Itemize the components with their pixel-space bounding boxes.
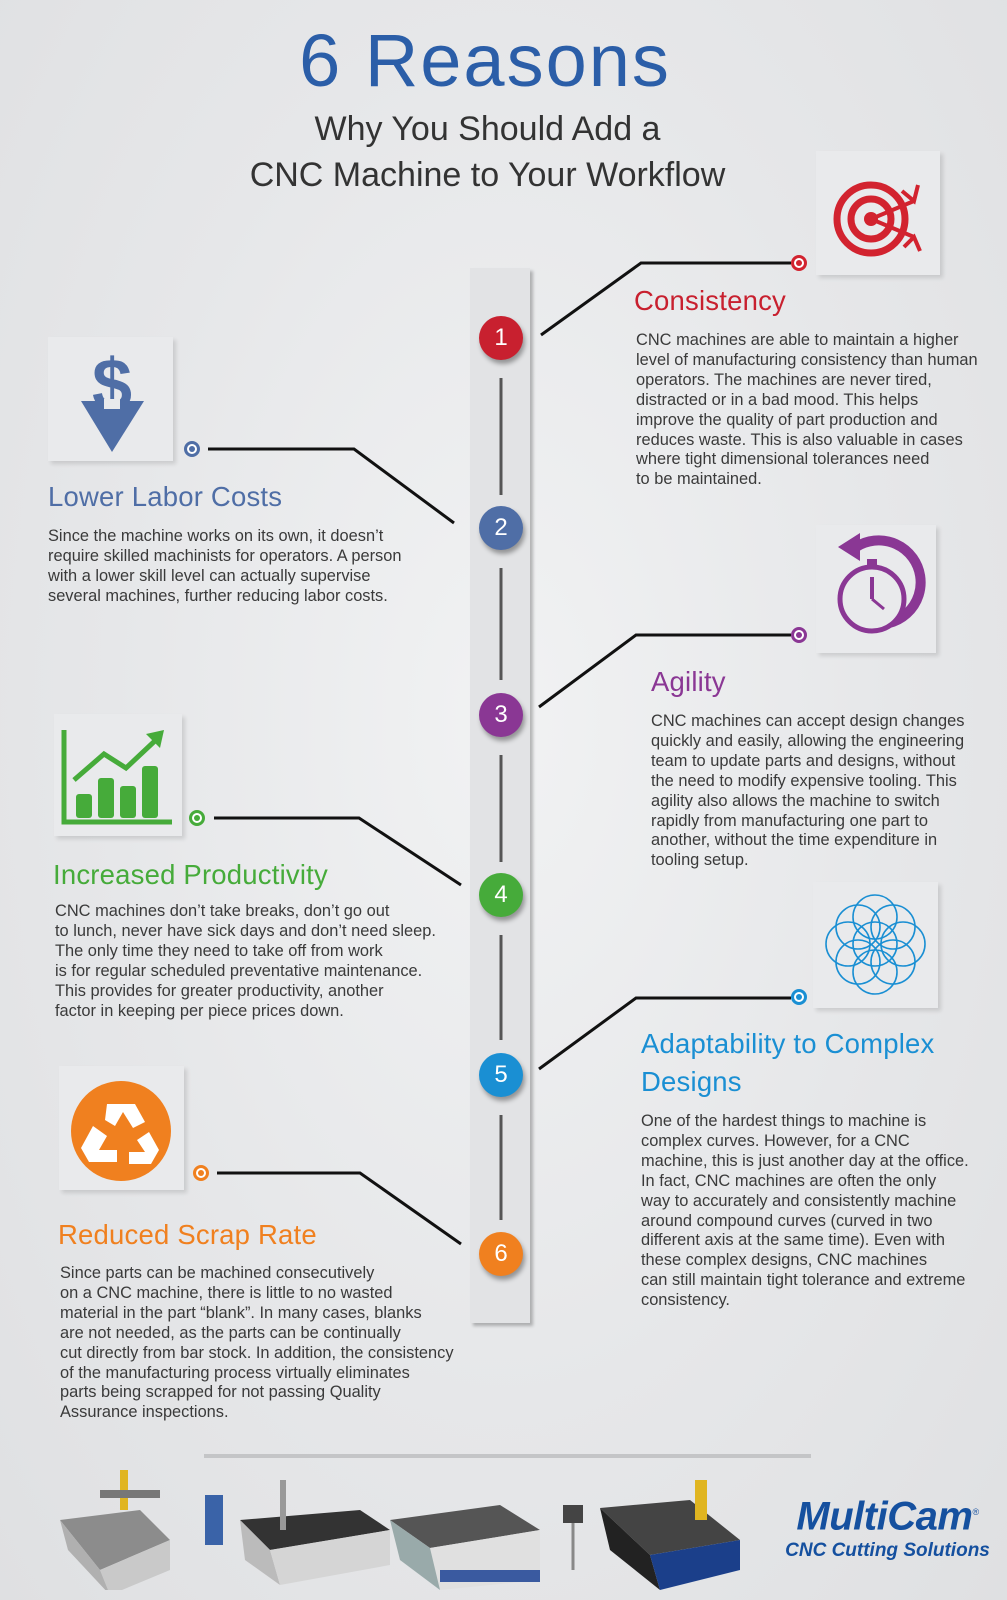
- text: around compound curves (curved in two: [641, 1212, 933, 1230]
- text: these complex designs, CNC machines: [641, 1251, 927, 1269]
- text: reduces waste. This is also valuable in cases: [636, 431, 963, 449]
- panel: lower labor costs: [48, 339, 401, 605]
- heading: Consistency: [634, 285, 786, 316]
- dot: [791, 989, 807, 1005]
- text: This provides for greater productivity, another: [55, 982, 384, 1000]
- text: consistency.: [641, 1291, 730, 1309]
- number circles: [479, 316, 523, 360]
- dot: [791, 627, 807, 643]
- dot: [189, 810, 205, 826]
- text: is for regular scheduled preventative maintenance.: [55, 962, 422, 980]
- text: with a lower skill level can actually supervise: [48, 567, 370, 585]
- text: Assurance inspections.: [60, 1403, 229, 1421]
- title: 6 Reasons: [299, 19, 671, 102]
- panel: agility: [651, 527, 964, 869]
- text: [48, 527, 401, 605]
- heading: Agility: [651, 666, 726, 697]
- text: level of manufacturing consistency than human: [636, 351, 978, 369]
- heading: Adaptability to Complex Designs: [641, 1028, 934, 1097]
- text: way to accurately and consistently machine: [641, 1192, 956, 1210]
- machine 1: [60, 1470, 170, 1595]
- text: agility also allows the machine to switch: [651, 792, 940, 810]
- text: factor in keeping per piece prices down.: [55, 1002, 344, 1020]
- divider: [204, 1454, 811, 1458]
- text: parts being scrapped for not passing Quality: [60, 1383, 381, 1401]
- text: 4: [494, 881, 508, 908]
- logo: MultiCam®: [796, 1494, 979, 1538]
- text: can still maintain tight tolerance and extreme: [641, 1271, 965, 1289]
- text: another, without the time expenditure in: [651, 831, 937, 849]
- text: distracted or in a bad mood. This helps: [636, 391, 918, 409]
- text: require skilled machinists for operators. A person: [48, 547, 401, 565]
- text: tooling setup.: [651, 851, 749, 869]
- machines illustration: [60, 1470, 740, 1590]
- text: 5: [494, 1061, 508, 1088]
- text: One of the hardest things to machine is: [641, 1112, 926, 1130]
- text: The only time they need to take off from work: [55, 942, 383, 960]
- text: the need to modify expensive tooling. This: [651, 772, 957, 790]
- text: Since parts can be machined consecutively: [60, 1264, 374, 1282]
- text: 2: [494, 514, 508, 541]
- logo: CNC Cutting Solutions: [785, 1540, 990, 1561]
- panel: consistency: [634, 153, 978, 488]
- text: In fact, CNC machines are often the only: [641, 1172, 936, 1190]
- text: machine, this is just another day at the office.: [641, 1152, 969, 1170]
- machine 2: [205, 1480, 390, 1585]
- text: Since the machine works on its own, it doesn’t: [48, 527, 383, 545]
- subtitle: CNC Machine to Your Workflow: [250, 156, 725, 194]
- text: on a CNC machine, there is little to no wasted: [60, 1284, 393, 1302]
- panel: increased productivity: [53, 716, 436, 1020]
- text: complex curves. However, for a CNC: [641, 1132, 910, 1150]
- text: several machines, further reducing labor costs.: [48, 587, 388, 605]
- text: quickly and easily, allowing the engineering: [651, 732, 964, 750]
- icon: stopwatch: [816, 525, 936, 653]
- icon: target: [816, 151, 940, 275]
- text: [55, 902, 436, 1020]
- text: improve the quality of part production and: [636, 411, 938, 429]
- subtitle: [250, 110, 726, 194]
- dot: [791, 255, 807, 271]
- panel: reduced scrap rate: [58, 1068, 454, 1421]
- icon: recycle: [59, 1066, 184, 1190]
- heading: Reduced Scrap Rate: [58, 1219, 317, 1250]
- text: cut directly from bar stock. In addition, the consistency: [60, 1344, 454, 1362]
- text: 3: [494, 701, 508, 728]
- machine 3: [390, 1505, 583, 1590]
- icon: circles pattern: [813, 882, 938, 1008]
- heading: Lower Labor Costs: [48, 481, 282, 512]
- timeline column: [470, 268, 530, 1323]
- text: material in the part “blank”. In many cases, blanks: [60, 1304, 422, 1322]
- heading: Increased Productivity: [53, 859, 328, 890]
- icon: dollar down: [48, 337, 173, 461]
- text: 6: [494, 1240, 508, 1267]
- machine 4: [600, 1480, 740, 1590]
- icon: chart: [54, 714, 182, 836]
- text: rapidly from manufacturing one part to: [651, 812, 928, 830]
- text: to be maintained.: [636, 470, 762, 488]
- text: CNC machines can accept design changes: [651, 712, 964, 730]
- text: [651, 712, 964, 869]
- text: to lunch, never have sick days and don’t need sleep.: [55, 922, 436, 940]
- text: [60, 1264, 454, 1421]
- text: where tight dimensional tolerances need: [636, 450, 929, 468]
- text: are not needed, as the parts can be continually: [60, 1324, 401, 1342]
- text: operators. The machines are never tired,: [636, 371, 932, 389]
- icon: dollar down: $: [92, 345, 132, 425]
- text: [636, 331, 978, 488]
- subtitle: Why You Should Add a: [315, 110, 660, 148]
- logo: [785, 1494, 990, 1561]
- text: team to update parts and designs, without: [651, 752, 955, 770]
- text: CNC machines are able to maintain a higher: [636, 331, 959, 349]
- text: different axis at the same time). Even with: [641, 1231, 945, 1249]
- dot: [184, 441, 200, 457]
- text: [641, 1112, 969, 1309]
- panel: adaptability: [641, 884, 969, 1309]
- text: CNC machines don’t take breaks, don’t go out: [55, 902, 389, 920]
- number circles: 1: [494, 324, 508, 351]
- dot: [193, 1165, 209, 1181]
- text: of the manufacturing process virtually eliminates: [60, 1364, 410, 1382]
